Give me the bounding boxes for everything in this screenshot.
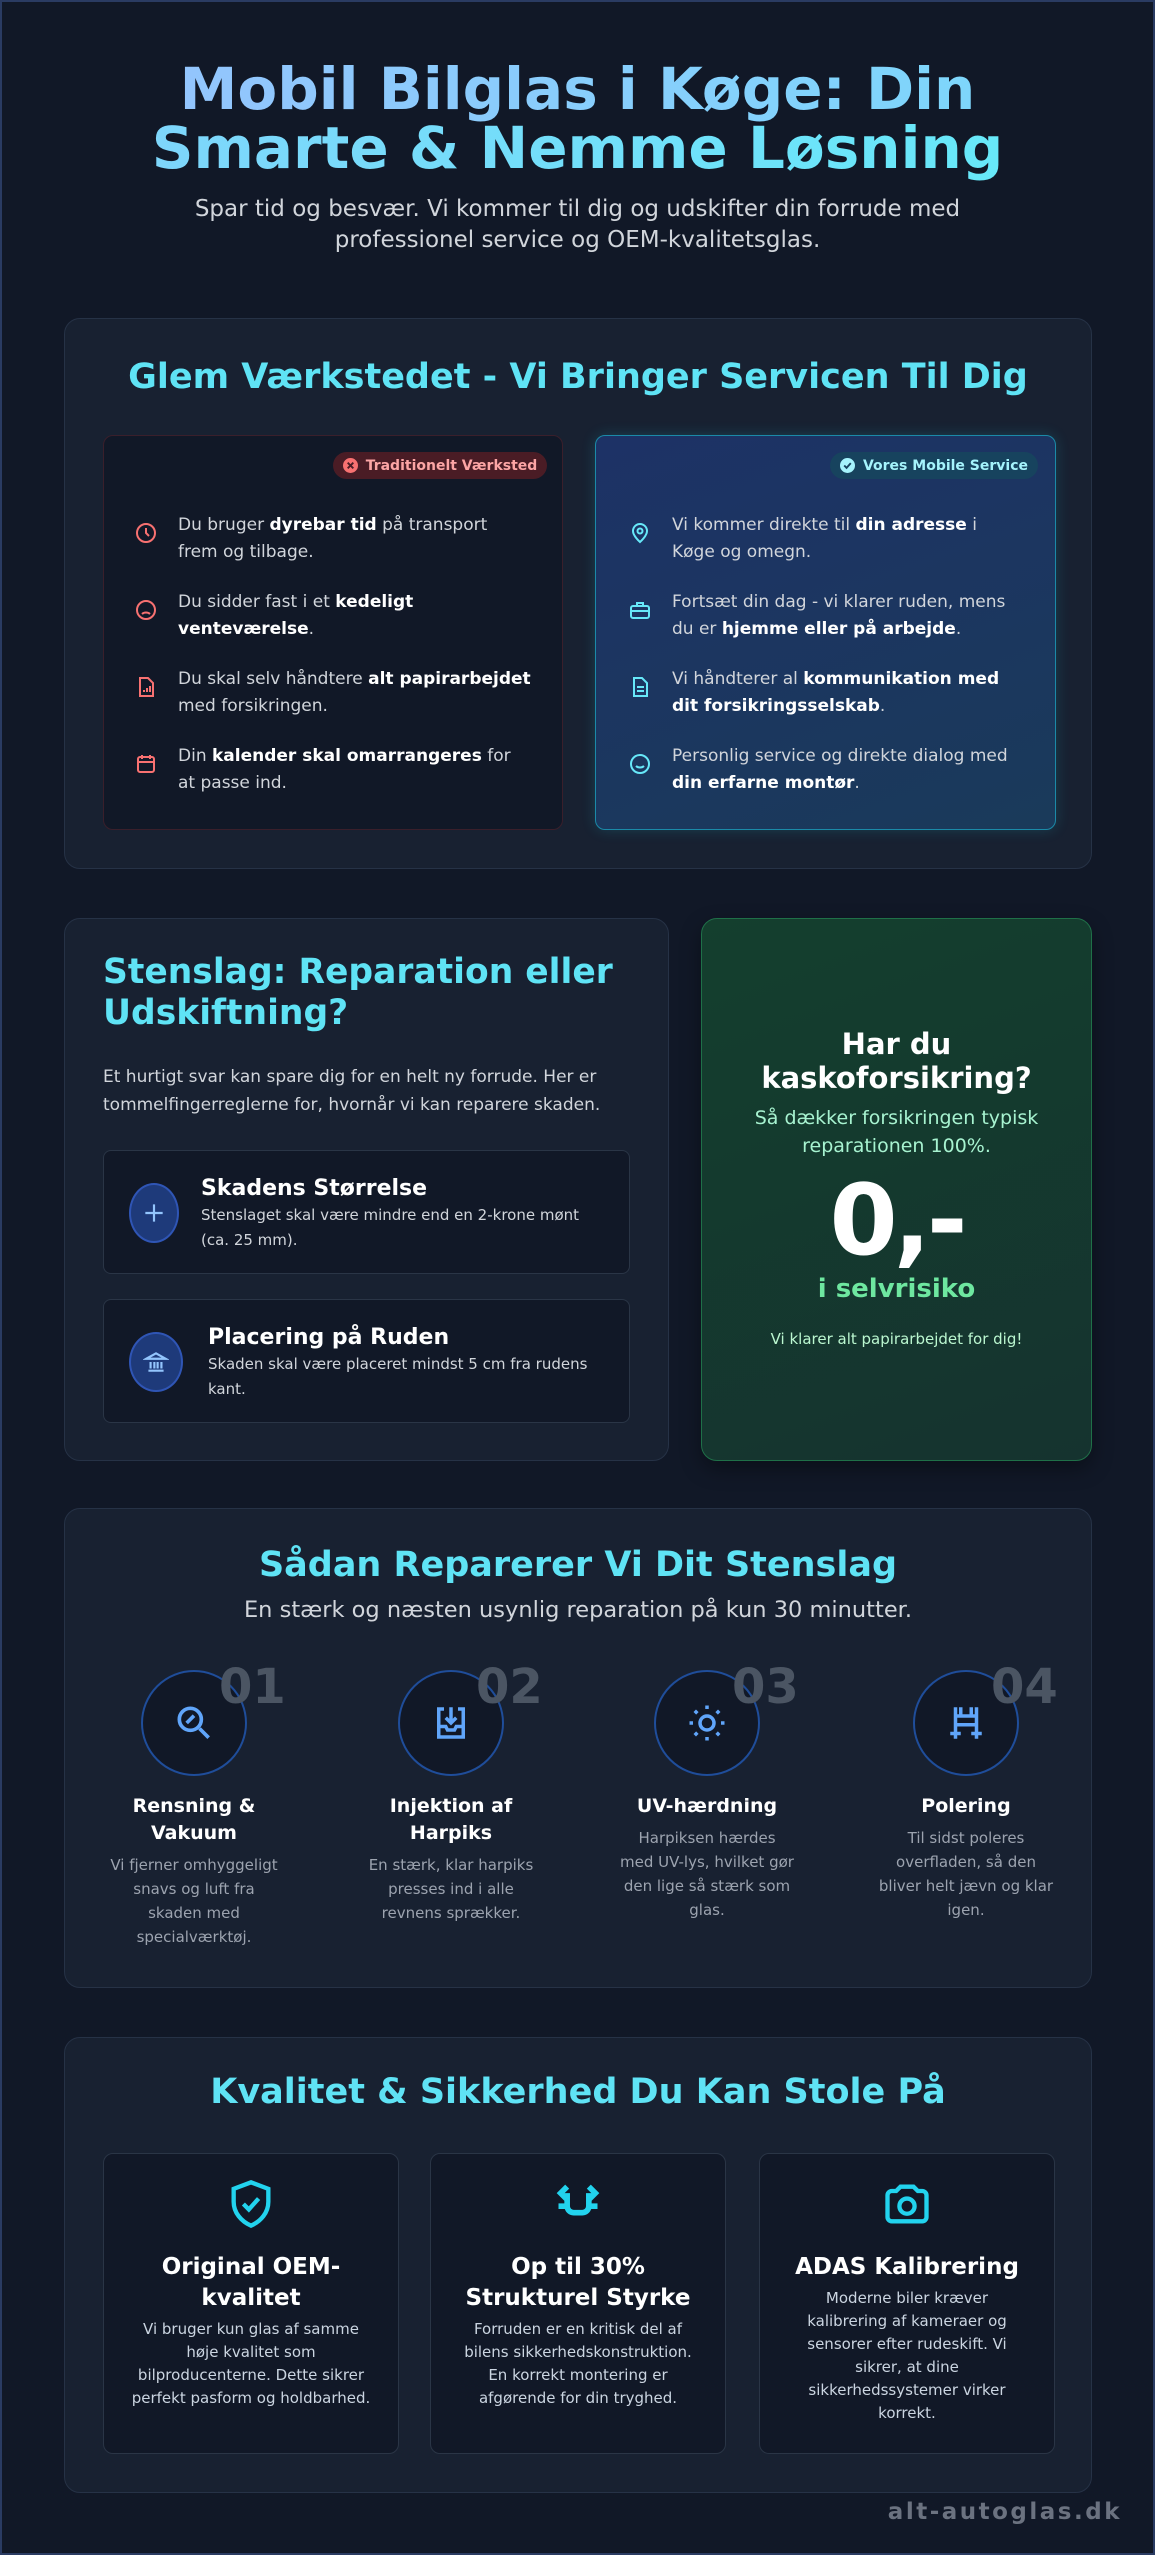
badge: mobile: Vores Mobile Service — [863, 458, 1028, 474]
subtitle: professionel service og OEM-kvalitetsglas. — [335, 227, 820, 253]
card: traditional workshop — [103, 435, 563, 830]
item: personal: Personlig service og direkte dialog med din erfarne montør. — [672, 746, 1008, 793]
heading: stenslag: Udskiftning? — [103, 993, 348, 1033]
step 1: 01 — [219, 1659, 286, 1715]
question — [761, 1027, 1032, 1095]
step 3: den lige så stærk som — [624, 1877, 790, 1895]
step 1 — [110, 1659, 286, 1946]
panel: insurance callout — [701, 918, 1092, 1461]
step 3: med UV-lys, hvilket gør — [620, 1853, 794, 1871]
list: drawbacks — [136, 515, 531, 793]
item: waiting room: Du sidder fast i et kedeligt venteværelse. — [178, 592, 413, 639]
step 2 — [369, 1659, 543, 1922]
badge: mobile — [830, 452, 1038, 479]
step 3: UV-hærdning — [637, 1795, 777, 1817]
step 3: Harpiksen hærdes — [638, 1829, 776, 1847]
subtitle — [195, 196, 960, 253]
text: placement: Placering på Ruden — [208, 1325, 449, 1350]
icon: building — [129, 1332, 183, 1392]
panel: quality — [64, 2037, 1092, 2493]
text: size: Stenslaget skal være mindre end en 2-krone mønt (ca. 25 mm). — [201, 1206, 579, 1249]
icon: structure — [556, 2184, 600, 2216]
heading: quality: Kvalitet & Sikkerhed Du Kan Stole På — [210, 2072, 946, 2112]
step 1: Rensning & — [133, 1795, 255, 1817]
icon: polish — [913, 1670, 1019, 1776]
card: structure: Forruden er en kritisk del af bilens sikkerhedskonstruktion. En korrekt montering er afgørende for din tryghed. — [464, 2320, 692, 2407]
badge: traditional — [333, 452, 547, 479]
item: paperwork: Du skal selv håndtere alt papirarbejdet med forsikringen. — [178, 669, 531, 716]
card: ADAS: ADAS Kalibrering — [795, 2254, 1019, 2280]
card: mobile service — [595, 435, 1056, 830]
step 4: overfladen, så den — [896, 1853, 1036, 1871]
step 2: En stærk, klar harpiks presses ind i alle revnens sprækker. — [369, 1856, 533, 1922]
step 3: 03 — [732, 1659, 799, 1715]
text: placement — [208, 1324, 587, 1398]
card: structure — [430, 2153, 726, 2454]
note: Vi klarer alt papirarbejdet for dig! — [771, 1330, 1022, 1348]
step 2: 02 — [476, 1659, 543, 1715]
panel: comparison — [64, 318, 1092, 869]
icon: inject — [398, 1670, 504, 1776]
subheading: process: En stærk og næsten usynlig reparation på kun 30 minutter. — [244, 1597, 912, 1623]
step 4: igen. — [947, 1901, 985, 1919]
step 4: bliver helt jævn og klar — [879, 1877, 1053, 1895]
item: work: Fortsæt din dag - vi klarer ruden, mens du er hjemme eller på arbejde. — [672, 592, 1005, 639]
item: calendar: Din kalender skal omarrangeres for at passe ind. — [178, 746, 511, 793]
rule box: placement — [103, 1299, 630, 1423]
step 4: 04 — [991, 1659, 1058, 1715]
step 2: Harpiks — [410, 1822, 492, 1844]
footer: domain: alt-autoglas.dk — [888, 2499, 1122, 2525]
panel: repair process — [64, 1508, 1092, 1988]
heading: stenslag — [103, 952, 613, 1033]
subtitle: Spar tid og besvær. Vi kommer til dig og udskifter din forrude med — [195, 196, 960, 222]
coverage text: reparationen 100%. — [802, 1135, 991, 1157]
card: structure: Op til 30% — [511, 2254, 645, 2280]
title — [152, 55, 1003, 182]
card: OEM: bilproducenterne. Dette sikrer — [138, 2366, 364, 2384]
heading: stenslag: Stenslag: Reparation eller — [103, 952, 613, 992]
icon: sun — [654, 1670, 760, 1776]
icon: shield — [232, 2180, 270, 2228]
coverage text: Så dækker forsikringen typisk — [755, 1107, 1038, 1129]
heading: comparison: Glem Værkstedet - Vi Bringer Servicen Til Dig — [128, 357, 1028, 397]
card: ADAS: Moderne biler kræver kalibrering af kameraer og sensorer efter rudeskift. Vi sikrer, at dine sikkerhedssystemer virker korrekt. — [807, 2289, 1007, 2422]
step 2: Injektion af — [390, 1795, 512, 1817]
list: benefits — [630, 515, 1008, 793]
panel: repair or replace — [64, 918, 669, 1461]
card: ADAS — [759, 2153, 1055, 2454]
card: OEM: perfekt pasform og holdbarhed. — [132, 2389, 370, 2407]
step 3: glas. — [689, 1901, 725, 1919]
item: time: Du bruger dyrebar tid på transport frem og tilbage. — [178, 515, 487, 562]
icon: plus — [129, 1183, 179, 1243]
item: insurance: Vi håndterer al kommunikation med dit forsikringsselskab. — [672, 669, 999, 716]
card: structure: Strukturel Styrke — [466, 2285, 690, 2311]
badge: traditional: Traditionelt Værksted — [366, 458, 537, 474]
card: OEM: høje kvalitet som — [186, 2343, 316, 2361]
icon: magnifier — [141, 1670, 247, 1776]
text: placement: Skaden skal være placeret mindst 5 cm fra rudens kant. — [208, 1355, 587, 1398]
step 1: Vi fjerner omhyggeligt snavs og luft fra skaden med specialværktøj. — [110, 1856, 278, 1946]
selvrisiko: i selvrisiko — [818, 1274, 975, 1304]
step 3 — [620, 1659, 799, 1919]
icon: camera — [885, 2184, 929, 2224]
card: OEM: Original OEM- — [162, 2254, 340, 2280]
question: kaskoforsikring? — [761, 1061, 1032, 1095]
big number: 0,- — [829, 1164, 964, 1278]
step 4: Polering — [921, 1795, 1011, 1817]
title: Smarte & Nemme Løsning — [152, 114, 1003, 182]
card: OEM — [103, 2153, 399, 2454]
intro text: Et hurtigt svar kan spare dig for en helt ny forrude. Her er tommelfingerreglerne for, hvornår vi kan reparere skaden. — [103, 1067, 600, 1115]
item: address: Vi kommer direkte til din adresse i Køge og omegn. — [672, 515, 977, 562]
card: OEM: Vi bruger kun glas af samme — [143, 2320, 359, 2338]
step 4: Til sidst poleres — [908, 1829, 1024, 1847]
question: Har du — [842, 1027, 951, 1061]
step 4 — [879, 1659, 1058, 1919]
text: size: Skadens Størrelse — [201, 1176, 427, 1201]
text: size — [201, 1176, 579, 1249]
rule box: size — [103, 1150, 630, 1274]
step 1: Vakuum — [151, 1822, 237, 1844]
title: Mobil Bilglas i Køge: Din — [180, 55, 975, 123]
heading: process: Sådan Reparerer Vi Dit Stenslag — [259, 1545, 897, 1585]
coverage text — [755, 1107, 1038, 1157]
card: OEM: kvalitet — [201, 2285, 301, 2311]
